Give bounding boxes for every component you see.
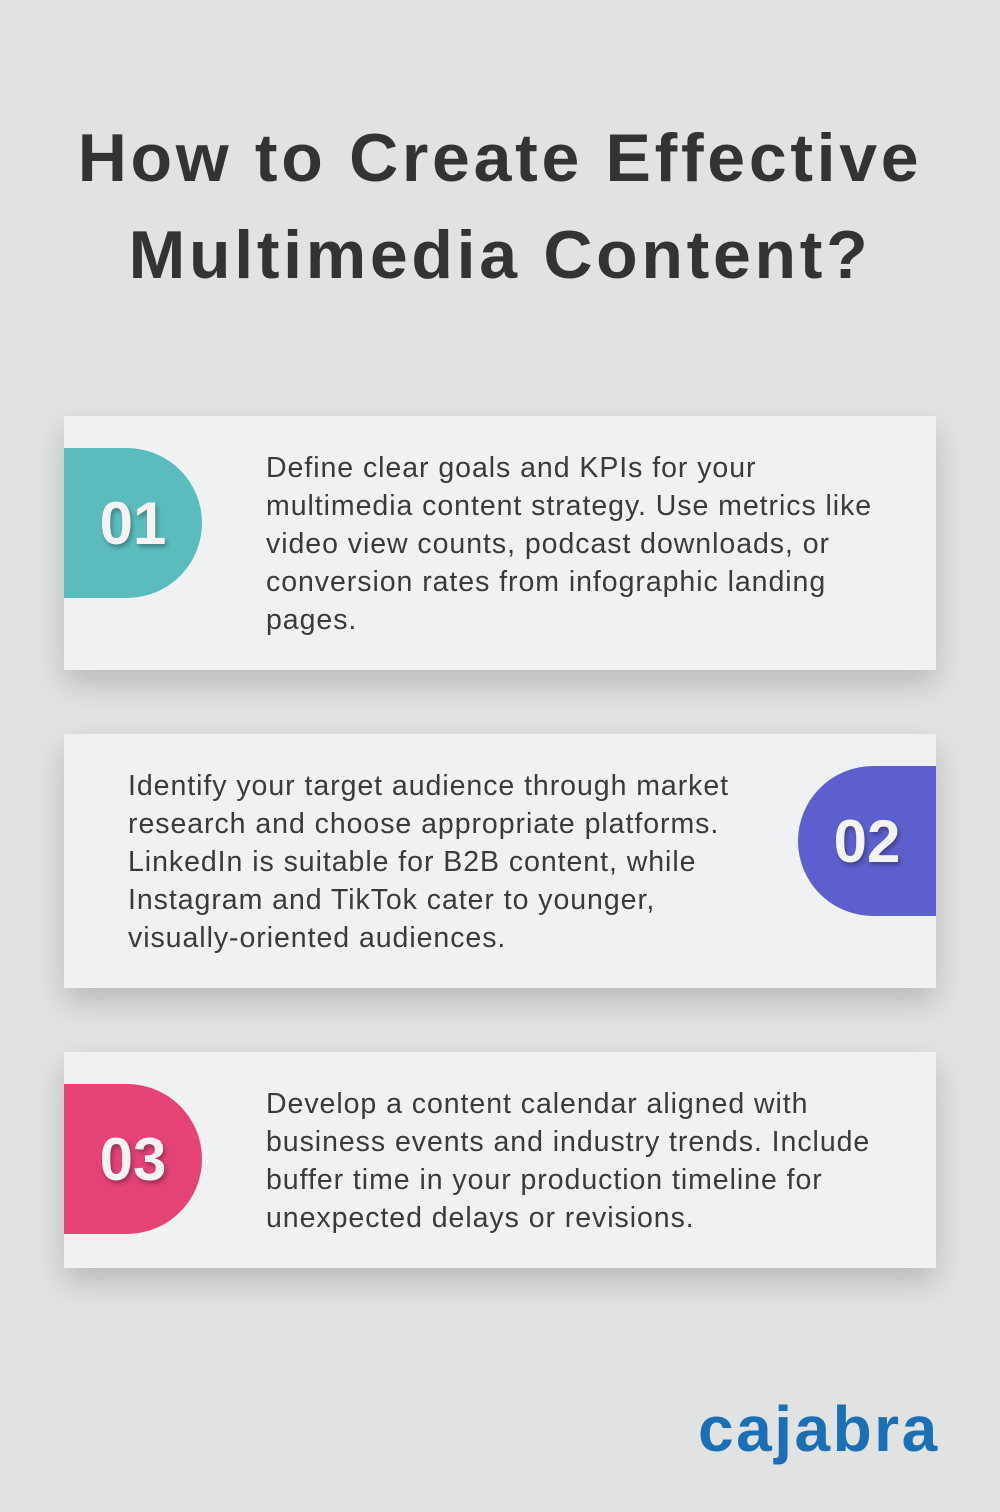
text: step 02: LinkedIn is suitable for B2B content, while (128, 846, 696, 878)
text: step 02: research and choose appropriate platforms. (128, 808, 719, 840)
title: How to Create Effective (78, 120, 922, 196)
text: step 03: buffer time in your production timeline for (266, 1164, 823, 1196)
title: Multimedia Content? (129, 217, 871, 293)
text: step 01: multimedia content strategy. Use metrics like (266, 490, 872, 522)
text: step 02: visually-oriented audiences. (128, 922, 506, 954)
badge: 02 (798, 766, 936, 916)
text: step 02: Identify your target audience through market (128, 770, 729, 802)
text: step 03: unexpected delays or revisions. (266, 1202, 695, 1234)
text: step 01: video view counts, podcast downloads, or (266, 528, 830, 560)
text: step 01 (266, 452, 872, 636)
text: step 02 (128, 770, 729, 954)
badge: 02: 02 (834, 808, 900, 874)
badge: 01: 01 (100, 490, 166, 556)
text: step 03: Develop a content calendar aligned with (266, 1088, 808, 1120)
text: step 02: Instagram and TikTok cater to younger, (128, 884, 655, 916)
panel: step 02 (64, 734, 936, 988)
title (78, 120, 922, 293)
logo: cajabra: cajabra (698, 1393, 940, 1465)
panel: step 03 (64, 1052, 936, 1268)
panel: step 01 (64, 416, 936, 670)
text: step 03: business events and industry trends. Include (266, 1126, 870, 1158)
text: step 03 (266, 1088, 870, 1234)
text: step 01: pages. (266, 604, 357, 636)
badge: 01 (64, 448, 202, 598)
badge: 03: 03 (100, 1126, 166, 1192)
badge: 03 (64, 1084, 202, 1234)
text: step 01: conversion rates from infographic landing (266, 566, 826, 598)
text: step 01: Define clear goals and KPIs for your (266, 452, 756, 484)
